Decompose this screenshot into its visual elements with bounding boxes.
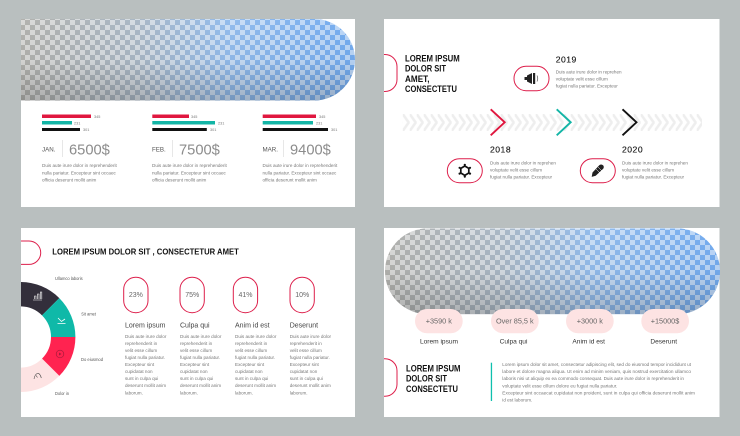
column: 75%: velit esse cillum (180, 348, 212, 353)
text: January: Duis aute irure dolor in reprehenderit (42, 163, 118, 168)
icon: gear (447, 159, 482, 183)
donut labels: Ullamco laboris (55, 276, 83, 281)
text: February (152, 163, 228, 182)
text: January: nulla pariatur. Excepteur sint occaec (42, 170, 116, 176)
stat: +3000 k: +3000 k (577, 317, 603, 326)
column: 23%: sunt in culpa qui (125, 376, 158, 381)
bars: March: 345 (319, 115, 325, 119)
column: 23%: fugiat nulla pariatur. (125, 355, 165, 360)
column: 41%: Duis aute irure dolor (235, 334, 277, 339)
segment: red (42, 337, 75, 376)
paragraph (502, 362, 695, 403)
arrow band (403, 114, 702, 131)
milestone 2019: 2019 (556, 54, 577, 64)
title tab (21, 241, 41, 264)
milestone 2020: voluptate velit esse cillum (622, 168, 674, 172)
value: March (262, 140, 331, 158)
paragraph: voluptate velit esse cillum dolore eu fugiat nulla pariatur. (502, 383, 617, 388)
heading: DOLOR SIT (405, 64, 447, 74)
column: 75%: sunt in culpa qui (180, 376, 213, 381)
column: 10%: sunt in culpa qui (290, 376, 323, 381)
milestone 2019: voluptate velit esse cillum (556, 76, 608, 82)
teal rule (491, 363, 492, 401)
value: February: FEB. (152, 146, 166, 154)
column: 41%: fugiat nulla pariatur. (235, 355, 275, 360)
column: 75%: deserunt mollit anim (180, 383, 221, 388)
donut labels: Do eiusmod (81, 357, 104, 362)
text: February: officia deserunt mollit anim (152, 178, 206, 182)
column: 75% (180, 277, 222, 395)
milestone 2018: Duis aute irure dolor in reprehen (490, 160, 556, 166)
column: 10%: laborum. (290, 390, 308, 395)
column: 41% (233, 277, 277, 395)
milestone 2018: 2018 (490, 145, 511, 155)
text: January (42, 163, 118, 182)
column: 23%: reprehenderit in (125, 341, 158, 346)
bars: February: 301 (210, 128, 216, 132)
text: March: Duis aute irure dolor in reprehenderit (262, 163, 338, 168)
January column (42, 114, 118, 182)
value: January: 6500$ (69, 142, 110, 158)
milestone 2018 (490, 145, 556, 180)
panel: monthly revenue (21, 19, 355, 207)
bars: January: 301 (83, 128, 89, 132)
stat: +15000$ (641, 309, 689, 346)
donut labels: Sit amet (81, 312, 97, 317)
column: 41%: Anim id est (235, 322, 270, 329)
stat: +3590 k (415, 309, 463, 346)
column: 75%: fugiat nulla pariatur. (180, 355, 220, 360)
column: 41%: reprehenderit in (235, 341, 268, 346)
column: 41%: Excepteur sint (235, 362, 265, 367)
milestone 2020: fugiat nulla pariatur. Excepteur (622, 174, 685, 180)
milestone 2019 (556, 54, 622, 88)
heading (406, 363, 460, 394)
column: 10%: Duis aute irure dolor (290, 334, 332, 339)
paragraph: Excepteur sint occaecat cupidatat non proident, sunt in culpa qui officia deserunt mollit anim (502, 390, 695, 396)
paragraph: laboris nisi ut aliquip ex ea commodo consequat. Duis aute irure dolor in reprehenderit in (502, 376, 684, 381)
column: 41%: 41% (238, 292, 253, 299)
stat: +15000$: +15000$ (651, 317, 679, 326)
text: March: officia deserunt mollit anim (262, 178, 317, 182)
value: January: JAN. (42, 146, 56, 154)
title tab (384, 54, 397, 92)
value: March: 9400$ (290, 142, 331, 158)
March column (262, 114, 338, 182)
value: March: MAR. (262, 146, 278, 154)
heading (405, 53, 460, 94)
value: January (42, 140, 110, 158)
image placeholder: rounded banner (21, 19, 355, 100)
stat: +3590 k: Lorem ipsum (420, 339, 459, 346)
bars: March (263, 114, 337, 132)
text: February: nulla pariatur. Excepteur sint occaec (152, 170, 226, 176)
column: 75%: cupidatat non (180, 369, 208, 374)
milestone 2020: 2020 (622, 145, 643, 155)
column: 23%: 23% (129, 292, 143, 299)
title tab (384, 359, 397, 396)
milestone 2018: voluptate velit esse cillum (490, 168, 542, 172)
arrow: red (491, 109, 505, 135)
donut labels (55, 276, 104, 396)
segment: dark (20, 282, 59, 315)
column: 10%: reprehenderit in (290, 341, 322, 346)
column: 23%: Duis aute irure dolor (125, 334, 167, 339)
column: 41%: sunt in culpa qui (235, 376, 268, 381)
column: 10%: Deserunt (290, 322, 318, 329)
panel: timeline (384, 19, 720, 207)
bars: January: 231 (74, 122, 80, 126)
image placeholder: pill banner (385, 228, 720, 314)
column: 41%: velit esse cillum (235, 348, 267, 353)
heading: AMET, (405, 74, 430, 84)
column: 10%: 10% (295, 292, 309, 299)
paragraph: labore et dolore magna aliqua. Ut enim ad minim veniam, quis nostrud exercitation ullamco (502, 369, 691, 374)
February column (152, 114, 228, 182)
value: February (152, 140, 220, 158)
column: 75%: 75% (185, 292, 199, 299)
icon: pencil (580, 159, 615, 183)
bars: February (152, 114, 224, 132)
stat: +3000 k: Anim id est (572, 339, 605, 346)
column: 10%: cupidatat non (290, 369, 318, 374)
paragraph: Lorem ipsum dolor sit amet, consectetur adipiscing elit, sed do eiusmod tempor incididunt ut (502, 362, 692, 367)
heading: DOLOR SIT (406, 374, 448, 384)
column: 23%: Excepteur sint (125, 362, 155, 367)
column: 75%: Duis aute irure dolor (180, 334, 222, 339)
milestone 2018: fugiat nulla pariatur. Excepteur (490, 174, 553, 180)
heading: LOREM IPSUM DOLOR SIT , CONSECTETUR AMET (52, 246, 240, 256)
column: 75%: reprehenderit in (180, 341, 213, 346)
bars: January (42, 114, 100, 132)
milestone 2020 (622, 145, 688, 180)
icon: megaphone (514, 66, 549, 91)
column: 23%: Lorem ipsum (125, 322, 166, 329)
stat: +15000$: Deserunt (650, 339, 677, 346)
heading: LOREM IPSUM (406, 363, 460, 373)
column: 23% (124, 277, 167, 395)
column: 41%: deserunt mollit anim (235, 383, 276, 388)
milestone 2019: Duis aute irure dolor in reprehen (556, 70, 622, 74)
column: 23%: cupidatat non (125, 369, 153, 374)
heading: CONSECTETU (405, 84, 457, 94)
arrow: black (622, 109, 636, 135)
column: 10%: Excepteur sint (290, 362, 320, 367)
stat: Over 85,5 k: Culpa qui (500, 339, 528, 346)
text: March (262, 163, 338, 182)
segment: teal (42, 298, 75, 337)
bars: February: 345 (191, 115, 197, 119)
text: January: officia deserunt mollit anim (42, 178, 96, 182)
column: 75%: laborum. (180, 390, 198, 395)
column: 23%: laborum. (125, 390, 143, 395)
column: 23%: deserunt mollit anim (125, 383, 166, 388)
segment: pink (20, 359, 59, 392)
bars: February: 231 (218, 122, 224, 126)
value: February: 7500$ (179, 142, 220, 158)
column: 23%: velit esse cillum (125, 348, 157, 353)
column: 41%: laborum. (235, 390, 253, 395)
arrow: teal (557, 109, 571, 135)
bars: March: 301 (331, 128, 337, 132)
stat: +3000 k (566, 309, 614, 346)
column: 75%: Excepteur sint (180, 362, 210, 367)
column: 10%: fugiat nulla pariatur. (290, 355, 330, 360)
text: March: nulla pariatur. Excepteur sint occaec (262, 170, 337, 176)
stat: +3590 k: +3590 k (426, 317, 452, 326)
bars: March: 231 (316, 122, 322, 126)
milestone 2020: Duis aute irure dolor in reprehen (622, 160, 688, 166)
stat: Over 85,5 k (491, 309, 539, 346)
panel: key figures (384, 228, 720, 417)
milestone 2019: fugiat nulla pariatur. Excepteur (556, 84, 618, 88)
column: 75%: Culpa qui (180, 322, 210, 329)
heading: CONSECTETU (406, 384, 458, 394)
text: February: Duis aute irure dolor in reprehenderit (152, 163, 228, 168)
column: 41%: cupidatat non (235, 369, 263, 374)
column: 10%: deserunt mollit anim (290, 383, 331, 388)
column: 10%: velit esse cillum (290, 348, 322, 353)
stat: Over 85,5 k: Over 85,5 k (496, 317, 534, 326)
panel: percentages (20, 228, 355, 417)
donut labels: Dolor in (55, 391, 70, 396)
heading: LOREM IPSUM (405, 53, 460, 63)
paragraph: id est laborum. (502, 398, 532, 403)
bars: January: 345 (94, 115, 100, 119)
donut chart (20, 282, 75, 392)
column: 10% (290, 277, 332, 395)
